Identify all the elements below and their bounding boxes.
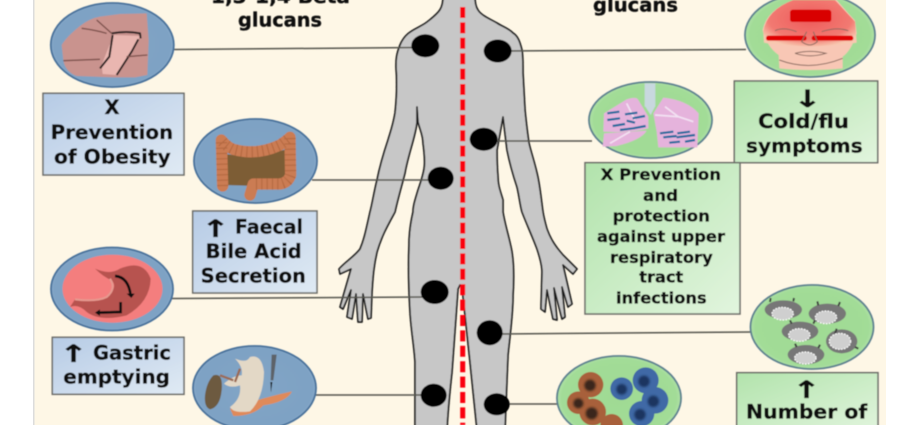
callout: number of cells: ↑ xyxy=(792,376,821,404)
heading: left beta glucans xyxy=(211,0,350,32)
callout: gastric emptying: emptying xyxy=(63,366,170,389)
callout: prevention of obesity: Prevention xyxy=(51,121,173,144)
callout: cold and flu symptoms xyxy=(734,81,878,163)
human body silhouette xyxy=(339,0,577,425)
callout: faecal bile acid secretion: Secretion xyxy=(201,265,306,288)
callout: prevention of respiratory infections: and xyxy=(643,186,678,205)
connector lines xyxy=(172,48,752,404)
callout: gastric emptying: Gastric xyxy=(93,341,171,364)
callout: cold and flu symptoms: ↓ xyxy=(793,85,822,113)
icon: obesity belly xyxy=(51,3,174,87)
callout: gastric emptying: ↑ xyxy=(59,340,88,368)
callout: gastric emptying xyxy=(52,337,184,394)
icon: immune cells xyxy=(750,285,874,369)
callout: prevention of obesity: of Obesity xyxy=(54,145,171,168)
callout: prevention of respiratory infections: against upper xyxy=(597,227,725,246)
callout: cold and flu symptoms: Cold/flu xyxy=(758,110,849,133)
callout: faecal bile acid secretion: Bile Acid xyxy=(206,240,302,263)
icon: stomach xyxy=(51,248,173,330)
icon: face with sinus inflammation xyxy=(745,0,875,77)
callout: faecal bile acid secretion xyxy=(193,211,317,293)
callout: cold and flu symptoms: symptoms xyxy=(746,135,863,158)
callout: number of cells: Number of xyxy=(746,401,868,424)
callout: prevention of respiratory infections: tract xyxy=(639,268,684,287)
heading: left beta glucans: glucans xyxy=(238,9,322,32)
callout: faecal bile acid secretion: Faecal xyxy=(235,216,303,239)
icon: gallbladder, stomach and pancreas xyxy=(193,346,316,425)
callout: prevention of respiratory infections: respiratory xyxy=(610,248,713,267)
central dashed red line xyxy=(460,7,465,425)
callout: prevention of respiratory infections xyxy=(585,163,740,314)
icon: brown and blue cell clusters xyxy=(557,356,681,425)
callout: prevention of respiratory infections: infections xyxy=(616,289,707,308)
callout: prevention of obesity xyxy=(43,93,184,175)
callout: prevention of respiratory infections: protection xyxy=(613,206,710,225)
callout: faecal bile acid secretion: ↑ xyxy=(201,215,230,243)
callout: prevention of obesity: X xyxy=(104,96,120,119)
icon: lungs with bacteria xyxy=(589,82,712,158)
callout: number of cells xyxy=(737,373,878,425)
callout: prevention of respiratory infections: X Prevention xyxy=(601,165,721,184)
black marker dots xyxy=(411,34,512,415)
icon: large intestine xyxy=(194,119,317,203)
